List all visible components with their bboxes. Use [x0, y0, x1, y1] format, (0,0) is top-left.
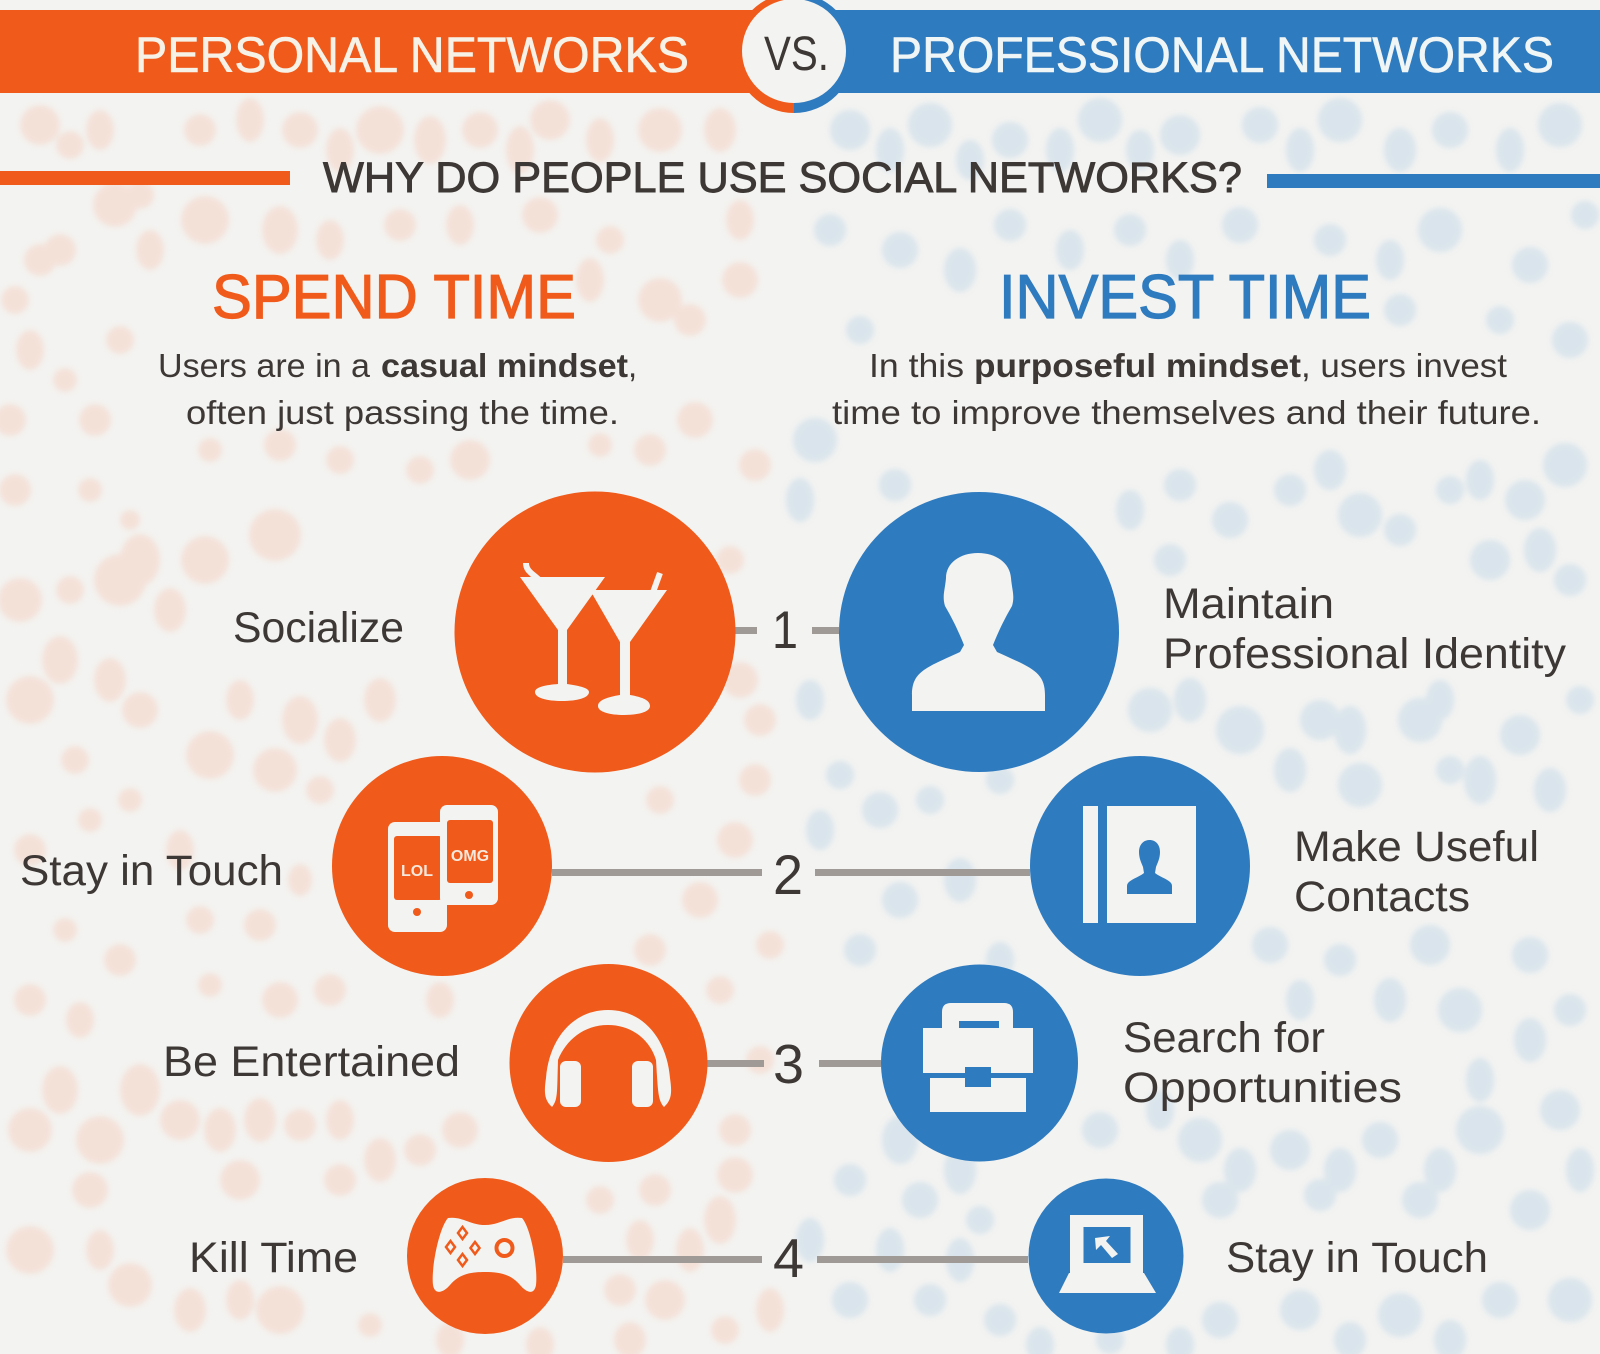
number 4: 4	[773, 1227, 804, 1289]
text: invest time description: purposeful mindset	[974, 347, 1301, 384]
connector row 1	[735, 627, 839, 634]
icon: phones: LOL	[401, 863, 433, 880]
header: professional networks bar	[800, 10, 1600, 93]
icon: briefcase	[881, 964, 1078, 1162]
text: invest time description	[832, 347, 1541, 431]
text: spend time description: often just passing the time.	[186, 394, 619, 431]
background dots: blue side	[786, 98, 1599, 1354]
heading: spend time: SPEND TIME	[212, 263, 576, 332]
label: stay in touch personal: Stay in Touch	[20, 847, 283, 895]
label: search for opportunities	[1123, 1014, 1402, 1112]
text: spend time description: ,	[628, 347, 637, 384]
number 3: 3	[773, 1033, 804, 1095]
label: stay in touch professional: Stay in Touch	[1226, 1234, 1488, 1282]
background dots: orange side	[0, 98, 784, 1354]
text: spend time description	[158, 347, 637, 431]
label: search for opportunities: Search for	[1123, 1014, 1325, 1062]
label: be entertained: Be Entertained	[163, 1038, 460, 1086]
icon: contact book	[1030, 756, 1250, 976]
label: maintain professional identity: Maintain	[1163, 580, 1334, 628]
label: make useful contacts: Contacts	[1294, 873, 1470, 921]
vs badge: VS.	[764, 28, 829, 81]
main question heading: WHY DO PEOPLE USE SOCIAL NETWORKS?	[323, 154, 1242, 202]
blue divider	[1267, 174, 1600, 188]
label: maintain professional identity	[1163, 580, 1567, 678]
text: invest time description: time to improve themselves and their future.	[832, 394, 1541, 431]
icon: phones: OMG	[451, 848, 489, 865]
connector row 2	[552, 869, 1030, 876]
icon: laptop	[1028, 1178, 1184, 1334]
label: make useful contacts: Make Useful	[1294, 823, 1539, 871]
connector row 3	[707, 1060, 881, 1067]
label: search for opportunities: Opportunities	[1123, 1064, 1402, 1112]
text: invest time description: , users invest	[1301, 347, 1507, 384]
header: personal networks bar	[0, 10, 800, 93]
vs badge	[734, 0, 854, 113]
label: maintain professional identity: Professional Identity	[1163, 630, 1567, 678]
heading: invest time: INVEST TIME	[999, 263, 1371, 332]
text: invest time description: In this	[869, 347, 964, 384]
connector row 4	[563, 1256, 1028, 1263]
label: socialize: Socialize	[233, 604, 404, 652]
header: personal networks bar: PERSONAL NETWORKS	[135, 27, 689, 83]
label: kill time: Kill Time	[189, 1234, 358, 1282]
icon: headphones	[510, 964, 708, 1162]
orange divider	[0, 171, 290, 185]
label: make useful contacts	[1294, 823, 1539, 921]
text: spend time description: Users are in a	[158, 347, 371, 384]
icon: game controller	[407, 1178, 563, 1334]
number 2: 2	[773, 843, 803, 906]
header: professional networks bar: PROFESSIONAL NETWORKS	[890, 27, 1554, 83]
number 1: 1	[772, 601, 798, 660]
icon: person	[839, 492, 1119, 772]
icon: phones	[332, 756, 552, 976]
text: spend time description: casual mindset	[381, 347, 628, 384]
icon: martini glasses	[454, 492, 736, 772]
